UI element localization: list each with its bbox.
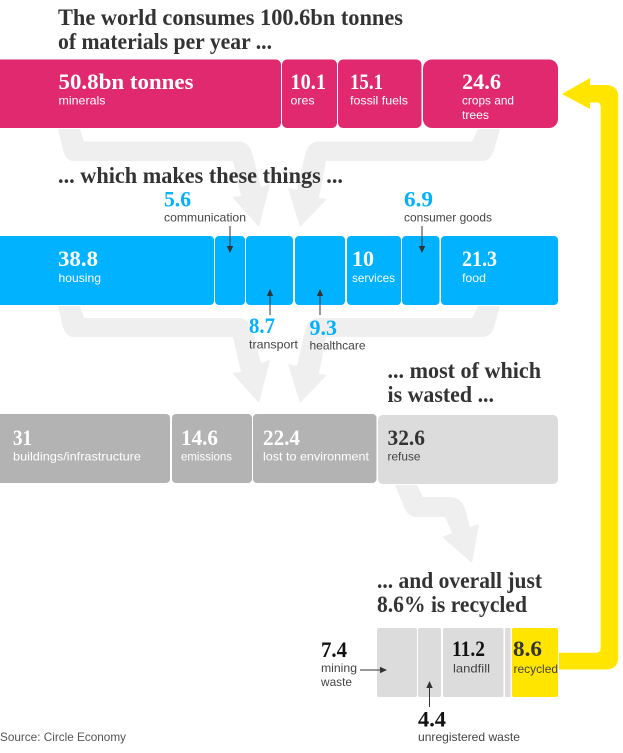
callout: unregistered waste — [418, 681, 520, 744]
lost to environment segment: 22.4 — [263, 425, 300, 450]
title: The world consumes 100.6bn tonnes — [58, 5, 403, 30]
recycled segment: recycled — [514, 662, 558, 676]
landfill segment: 11.2 — [452, 636, 485, 661]
fossil fuels segment — [338, 60, 422, 128]
buildings segment: 31 — [13, 425, 32, 450]
recycled segment — [512, 628, 558, 697]
panel: materials consumed — [0, 60, 558, 128]
ores segment: 10.1 — [290, 69, 326, 94]
heading: which makes these things: ... which makes these things ... — [58, 163, 343, 188]
food segment — [441, 236, 558, 305]
lost to environment segment: lost to environment — [263, 450, 370, 464]
callout: transport: 8.7 — [249, 313, 275, 338]
minerals segment: 50.8bn tonnes — [58, 69, 194, 94]
housing segment — [0, 236, 214, 305]
unregistered waste segment — [418, 628, 441, 697]
flow arrow: crops to products — [288, 129, 500, 227]
buildings segment: buildings/infrastructure — [13, 450, 141, 464]
crops and trees segment: crops and — [462, 94, 514, 108]
crops and trees segment: trees — [462, 108, 489, 122]
landfill segment: landfill — [453, 662, 490, 676]
landfill segment — [443, 628, 504, 697]
callout: mining waste: waste — [320, 675, 352, 689]
heading: most of which is wasted — [388, 358, 541, 407]
source note: Source: Circle Economy — [0, 730, 126, 744]
housing segment: 38.8 — [58, 246, 98, 271]
mining waste segment — [377, 628, 417, 697]
fossil fuels segment: fossil fuels — [350, 94, 408, 108]
emissions segment: emissions — [181, 450, 232, 464]
panel: outputs — [0, 414, 558, 484]
flow arrow: minerals to products — [58, 129, 270, 227]
housing segment: housing — [58, 271, 101, 285]
callout: mining waste — [320, 637, 387, 689]
services segment: 10 — [352, 246, 374, 271]
callout: transport: transport — [249, 338, 299, 352]
refuse segment: 32.6 — [388, 425, 425, 450]
title — [58, 5, 403, 54]
ores segment: ores — [290, 94, 314, 108]
callout: consumer goods — [404, 187, 492, 253]
arrow: recycled loop back — [559, 78, 618, 670]
crops and trees segment — [423, 60, 558, 128]
ores segment — [282, 60, 337, 128]
callout: mining waste: 7.4 — [321, 637, 347, 662]
fossil fuels segment: 15.1 — [350, 69, 383, 94]
panel: refuse breakdown — [377, 628, 558, 697]
heading: overall just 8.6% recycled — [377, 568, 542, 617]
heading: overall just 8.6% recycled: 8.6% is recycled — [377, 592, 527, 617]
heading: most of which is wasted: is wasted ... — [388, 382, 494, 407]
callout: unregistered waste: 4.4 — [418, 707, 446, 732]
title: of materials per year ... — [58, 29, 272, 54]
refuse segment: refuse — [388, 450, 421, 464]
communication segment — [215, 236, 245, 305]
callout: consumer goods: 6.9 — [404, 187, 433, 212]
callout: communication: 5.6 — [164, 187, 191, 212]
callout: mining waste: mining — [321, 661, 357, 675]
buildings segment — [0, 414, 170, 483]
flow arrow: housing to outputs — [58, 306, 270, 403]
minerals segment: minerals — [58, 94, 106, 108]
sliver segment — [505, 628, 510, 697]
callout: healthcare: healthcare — [310, 338, 366, 352]
callout: communication: communication — [164, 211, 246, 225]
healthcare segment — [295, 236, 345, 305]
emissions segment: 14.6 — [181, 425, 218, 450]
food segment: 21.3 — [462, 246, 497, 271]
consumer goods segment — [402, 236, 440, 305]
recycled segment: 8.6 — [513, 636, 542, 661]
services segment: services — [352, 271, 395, 285]
services segment — [347, 236, 401, 305]
minerals segment — [0, 60, 281, 128]
food segment: food — [462, 271, 486, 285]
callout: healthcare: 9.3 — [310, 315, 337, 340]
flow arrow: food to outputs — [288, 306, 500, 403]
lost to environment segment — [253, 414, 376, 483]
transport segment — [246, 236, 293, 305]
panel: products — [0, 236, 558, 305]
heading: overall just 8.6% recycled: ... and overall just — [377, 568, 542, 593]
callout: unregistered waste: unregistered waste — [418, 730, 520, 744]
refuse segment — [378, 415, 558, 484]
flow arrow: refuse to recycled — [395, 485, 479, 563]
crops and trees segment: 24.6 — [462, 69, 501, 94]
callout: communication — [164, 187, 246, 253]
callout: transport — [249, 289, 299, 352]
heading: most of which is wasted: ... most of which — [388, 358, 541, 383]
callout: healthcare — [310, 289, 366, 352]
callout: consumer goods: consumer goods — [404, 211, 492, 225]
emissions segment — [172, 414, 252, 483]
